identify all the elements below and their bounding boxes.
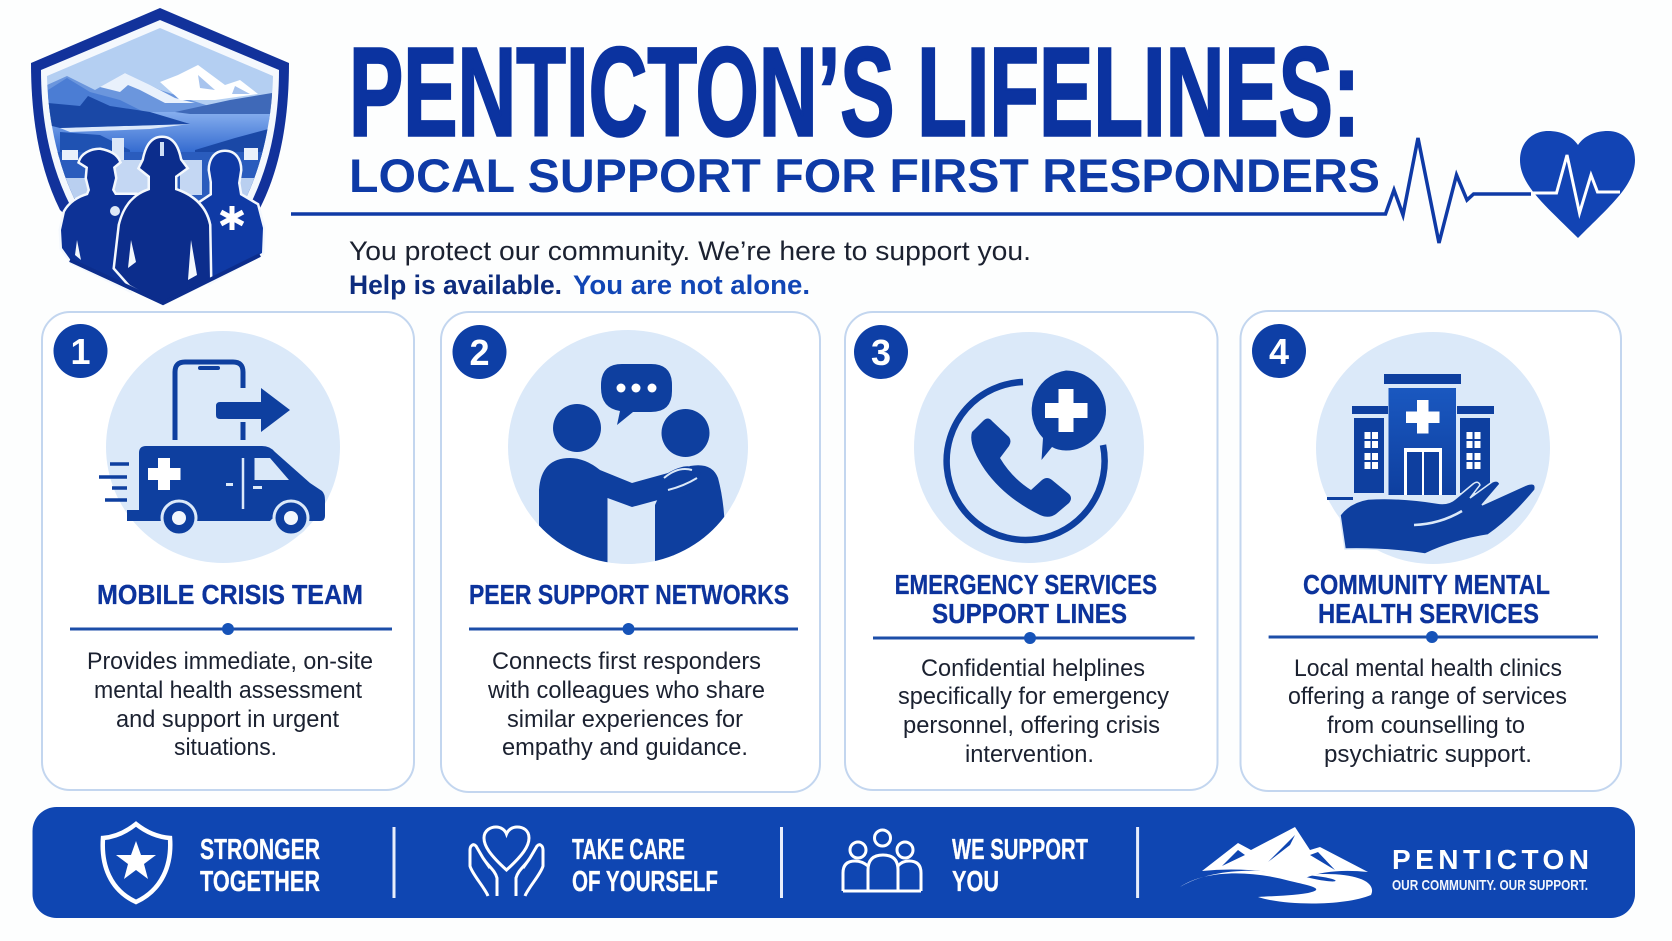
number badge 1: 1	[70, 331, 91, 372]
slogan: stronger together: TOGETHER	[200, 866, 320, 898]
slogan: take care of yourself: OF YOURSELF	[572, 866, 718, 898]
card text: Confidential helplines	[921, 655, 1145, 682]
card title: COMMUNITY MENTAL	[1303, 569, 1550, 600]
logo: shield with first responders	[31, 8, 289, 303]
card text: personnel, offering crisis	[903, 712, 1160, 739]
card text: Provides immediate, on-site	[87, 648, 373, 675]
number badge 4: 4	[1269, 331, 1289, 372]
card title	[1303, 569, 1550, 629]
help message: Help is available.	[349, 270, 562, 300]
slogan: take care of yourself: TAKE CARE	[572, 834, 685, 866]
icon: phone with medical bubble	[914, 332, 1144, 563]
icon: ambulance and phone	[99, 331, 340, 563]
card text: offering a range of services	[1288, 683, 1567, 710]
card title	[895, 569, 1157, 629]
card text: mental health assessment	[94, 677, 362, 704]
brand name: PENTICTON	[1392, 844, 1589, 875]
tagline: You protect our community. We’re here to support you.	[349, 236, 1031, 266]
icon: group of people	[843, 830, 921, 891]
card title: SUPPORT LINES	[932, 598, 1127, 629]
slogan: take care of yourself	[572, 834, 718, 898]
help message	[349, 270, 810, 300]
card text	[898, 655, 1169, 768]
number badge 2: 2	[469, 332, 490, 373]
slogan: we support you: YOU	[952, 866, 999, 898]
card text: similar experiences for	[507, 706, 743, 733]
card text	[487, 648, 765, 761]
card text: intervention.	[965, 741, 1094, 768]
panel: mobile crisis team	[42, 312, 414, 790]
divider	[70, 623, 392, 635]
icon: shield with star	[103, 824, 170, 902]
number badge 4	[1252, 324, 1306, 378]
card text: from counselling to	[1327, 712, 1525, 739]
number badge 1	[54, 324, 108, 378]
panel: peer support networks	[441, 312, 820, 792]
slogan: stronger together	[200, 834, 320, 898]
divider	[873, 632, 1195, 644]
brand tagline: OUR COMMUNITY. OUR SUPPORT.	[1392, 877, 1588, 894]
card text	[1288, 655, 1567, 768]
icon: heart with pulse	[1520, 131, 1635, 238]
slogan: stronger together: STRONGER	[200, 834, 320, 866]
card text: Connects first responders	[492, 648, 761, 675]
card title: PEER SUPPORT NETWORKS	[469, 579, 789, 610]
card text: situations.	[174, 734, 277, 761]
card text: psychiatric support.	[1324, 741, 1532, 768]
panel: emergency services support lines	[845, 312, 1218, 790]
card title: MOBILE CRISIS TEAM	[97, 579, 363, 610]
panel: community mental health services	[1240, 311, 1621, 791]
divider	[469, 623, 798, 635]
card text: Local mental health clinics	[1294, 655, 1562, 682]
divider	[1269, 631, 1598, 643]
heartbeat line	[291, 138, 1531, 243]
number badge 3: 3	[871, 332, 891, 373]
card text: empathy and guidance.	[502, 734, 748, 761]
logo: Penticton mountains	[1180, 827, 1372, 904]
card text: and support in urgent	[116, 706, 339, 733]
slogan: we support you: WE SUPPORT	[952, 834, 1088, 866]
card title: EMERGENCY SERVICES	[895, 569, 1157, 600]
footer banner	[32, 807, 1635, 918]
number badge 3	[854, 325, 908, 379]
icon: hands holding heart	[470, 827, 543, 896]
icon: hospital on hand	[1316, 332, 1550, 564]
number badge 2	[452, 325, 506, 379]
icon: peers talking	[508, 330, 748, 590]
slogan: we support you	[952, 834, 1088, 898]
card text: specifically for emergency	[898, 683, 1169, 710]
help message: You are not alone.	[573, 270, 810, 300]
card text: with colleagues who share	[487, 677, 765, 704]
subtitle: LOCAL SUPPORT FOR FIRST RESPONDERS	[349, 149, 1380, 202]
card title: HEALTH SERVICES	[1318, 598, 1539, 629]
card text	[87, 648, 373, 761]
